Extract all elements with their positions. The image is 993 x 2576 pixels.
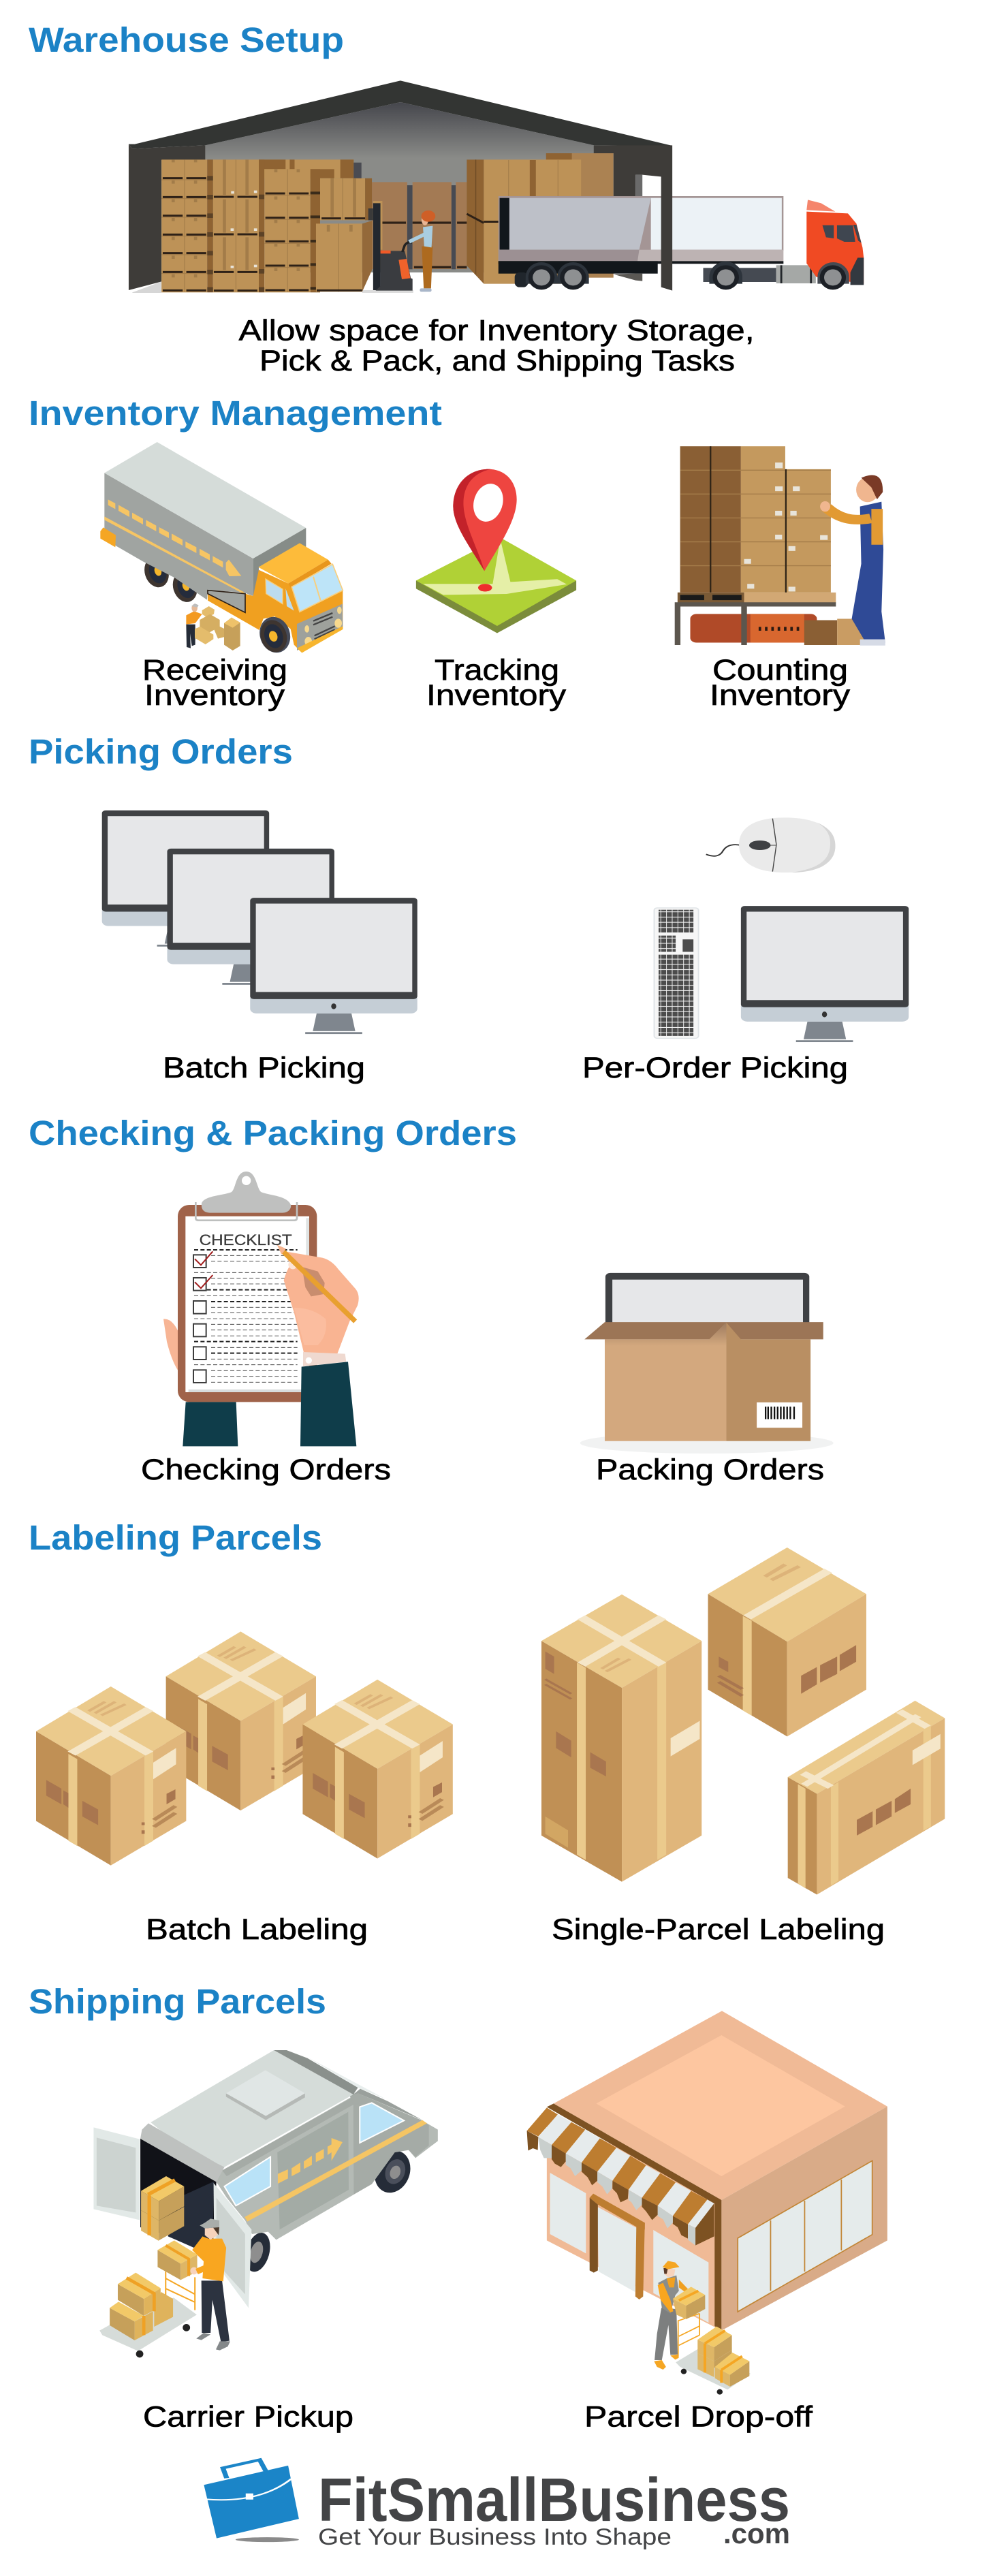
van doors	[93, 2127, 251, 2308]
corner post	[714, 2200, 721, 2331]
labels: inventory: Inventory	[144, 679, 285, 712]
carton stack 2	[213, 159, 264, 292]
icon: tall parcel	[541, 1595, 702, 1882]
labels: checking and packing: Packing Orders	[596, 1454, 824, 1486]
pallet truck	[368, 201, 413, 291]
CHECKLIST clipboard title: CHECKLIST	[200, 1231, 292, 1248]
labels: checking and packing: Checking Orders	[141, 1454, 391, 1486]
courier with cart	[99, 2218, 230, 2357]
labels: checking and packing	[141, 1454, 824, 1486]
labels: inventory: Receiving	[142, 654, 287, 687]
icon: counting inventory	[678, 446, 885, 646]
icon: receiving truck	[100, 442, 343, 657]
icon: computer mouse	[706, 817, 835, 873]
heading: Picking Orders: Picking Orders	[29, 732, 293, 771]
icon: parcel store with courier	[527, 2011, 887, 2395]
illustration: warehouse with truck	[129, 80, 864, 293]
illustration: inventory	[416, 446, 885, 646]
caption: warehouse setup: Pick & Pack, and Shipping Tasks	[259, 345, 735, 377]
van body	[140, 2050, 438, 2250]
labels: inventory: Inventory	[426, 679, 567, 712]
cartons behind	[259, 159, 467, 269]
store door	[590, 2194, 645, 2299]
labels: inventory: Counting	[712, 654, 848, 687]
awning	[527, 2103, 721, 2246]
caption: warehouse setup: Allow space for Inventory Storage,	[238, 315, 755, 347]
truck cab	[208, 543, 343, 653]
warehouse right wall	[594, 145, 672, 291]
carton stack right	[467, 159, 484, 284]
carton stacks 4 and 5	[316, 178, 372, 292]
icon: flat parcel	[788, 1701, 945, 1895]
icon: keyboard	[654, 908, 699, 1038]
parcels in van	[141, 2176, 184, 2241]
labels: picking: Batch Picking	[163, 1052, 365, 1084]
warehouse building	[129, 80, 672, 293]
heading: Shipping Parcels: Shipping Parcels	[29, 1982, 326, 2021]
logo: wordmark: FitSmallBusiness	[318, 2466, 790, 2534]
icon: carrier van with courier	[93, 2050, 438, 2357]
illustration: picking and packing	[102, 811, 909, 1454]
carton stack 3	[264, 169, 334, 292]
worker with parcels	[186, 603, 240, 650]
logo: briefcase	[204, 2460, 299, 2542]
labels: picking: Per-Order Picking	[582, 1052, 848, 1084]
labels: labeling	[146, 1913, 885, 1946]
carton stack 1	[161, 159, 213, 292]
hand with pencil	[277, 1244, 359, 1446]
truck cab	[806, 200, 864, 285]
icon: batch monitors	[102, 811, 417, 1034]
worker	[409, 210, 435, 292]
heading: Warehouse Setup: Warehouse Setup	[29, 20, 344, 59]
icon: map pin	[416, 469, 576, 633]
icon: batch of three parcels	[36, 1631, 453, 1866]
icon: monitor in box	[580, 1273, 834, 1454]
truck wheels	[515, 262, 849, 289]
icon: checklist clipboard	[163, 1172, 359, 1446]
truck wheels rear	[141, 554, 172, 591]
heading: Checking & Packing Orders: Checking & Packing Orders	[29, 1114, 517, 1152]
logo: wordmark: .com	[723, 2517, 790, 2549]
tractor chassis	[703, 265, 816, 283]
front wheel	[255, 613, 295, 657]
icon: monitor	[741, 906, 909, 1042]
monitor 2	[167, 849, 334, 985]
labels: inventory: Tracking	[435, 654, 559, 687]
cartons at dock	[484, 153, 614, 284]
labels: picking	[163, 1052, 848, 1084]
courier with cart	[654, 2261, 751, 2395]
icon: square parcel	[708, 1548, 866, 1736]
labels: labeling: Single-Parcel Labeling	[552, 1913, 885, 1946]
labels: inventory	[142, 654, 851, 712]
worker	[820, 475, 885, 646]
illustration: parcels	[36, 1548, 945, 1895]
store windows	[550, 2161, 872, 2323]
labels: shipping	[143, 2400, 813, 2433]
store walls and roof	[547, 2011, 887, 2331]
labels: inventory: Inventory	[710, 679, 851, 712]
labels: shipping: Carrier Pickup	[143, 2400, 353, 2433]
logo: wordmark: Get Your Business Into Shape	[318, 2524, 672, 2550]
labels: shipping: Parcel Drop-off	[584, 2400, 813, 2433]
heading: Labeling Parcels: Labeling Parcels	[29, 1518, 322, 1557]
labels: labeling: Batch Labeling	[146, 1913, 368, 1946]
caption: warehouse setup	[238, 315, 755, 377]
trailer	[499, 196, 783, 274]
van wheels	[241, 2146, 416, 2274]
cargo box	[100, 442, 306, 600]
monitor 1	[102, 811, 269, 947]
heading: Inventory Management: Inventory Management	[29, 394, 442, 433]
monitor 3	[250, 898, 417, 1034]
